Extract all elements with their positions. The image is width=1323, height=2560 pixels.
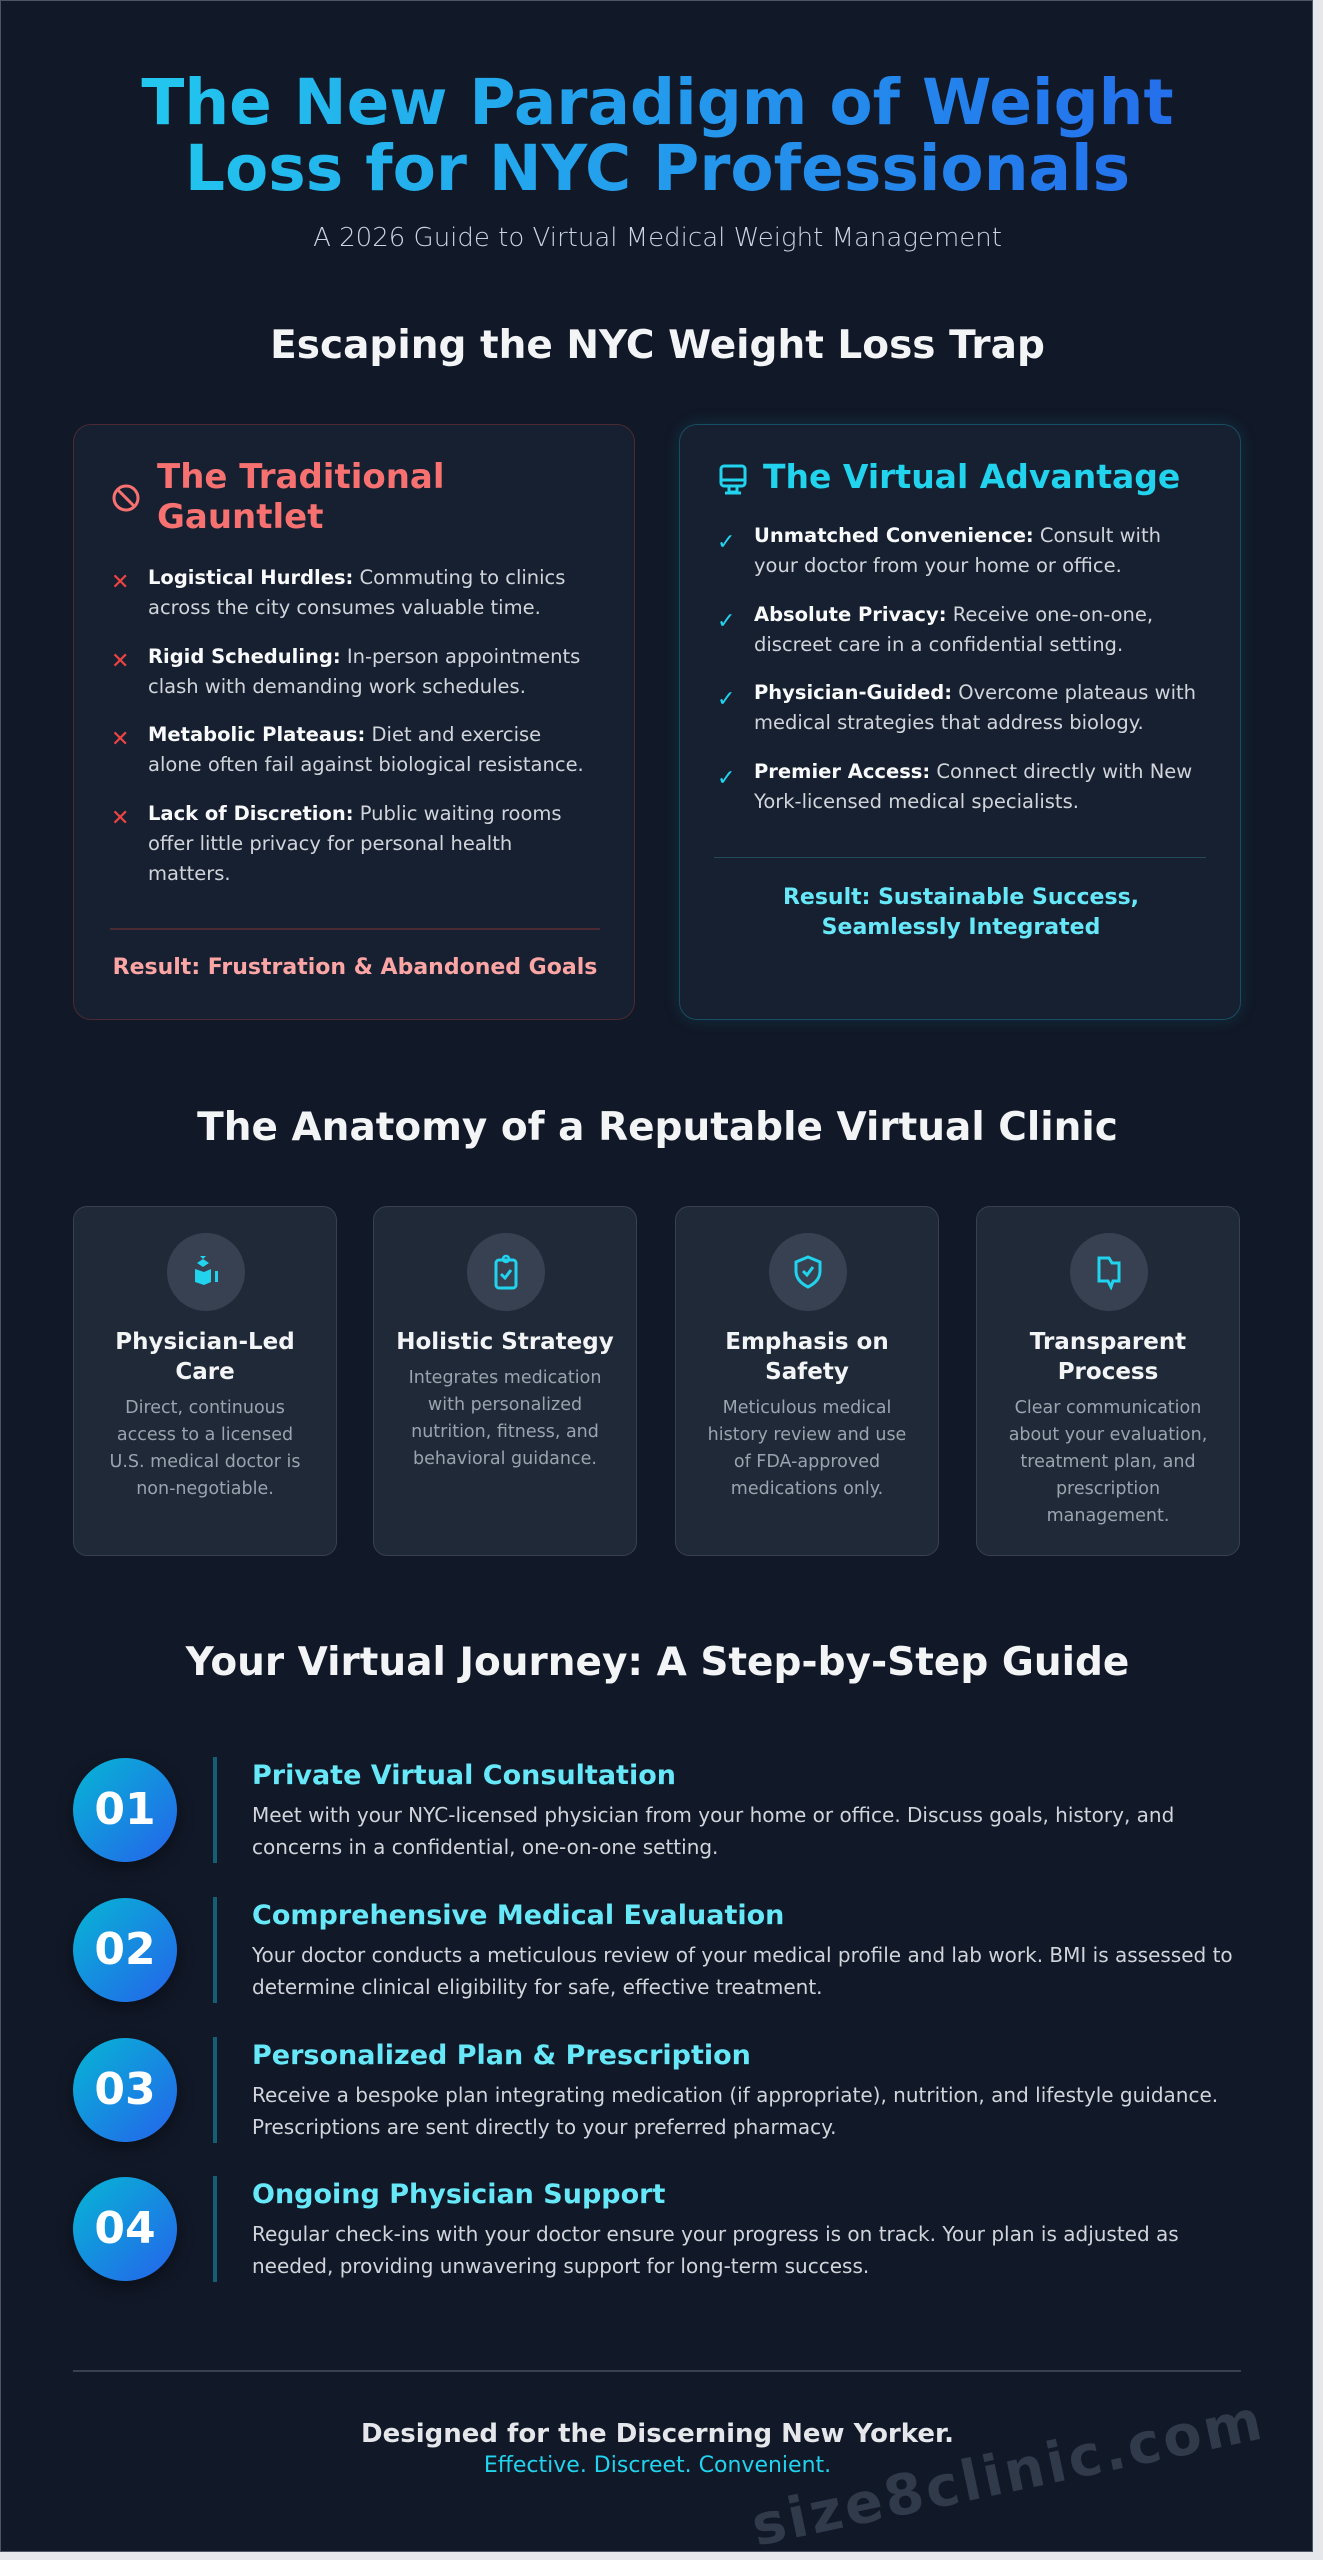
footer (361, 2419, 954, 2478)
list: hurdles: ✕ (111, 649, 129, 674)
card: safety: Safety (765, 1359, 849, 1385)
title (1, 70, 1314, 202)
card: transparent: Process (1058, 1359, 1158, 1385)
card: safety (675, 1206, 939, 1556)
step 04 (73, 2176, 1179, 2286)
card: physician-led: Direct, continuous access to a licensed U.S. medical doctor is non-negotiable. (110, 1398, 300, 1499)
panel: virtual advantage (679, 424, 1241, 1020)
icon: doctor (167, 1233, 245, 1311)
result: sustainable success: Result: Sustainable Success, (783, 885, 1139, 910)
panel: traditional gauntlet (73, 424, 635, 1020)
heading: journey: Your Virtual Journey: A Step-by-Step Guide (186, 1640, 1129, 1685)
list: benefits (717, 524, 1196, 813)
list: hurdles: ✕ (111, 570, 129, 595)
card: holistic (373, 1206, 637, 1556)
step 02: Comprehensive Medical Evaluation (252, 1900, 784, 1931)
title: Loss for NYC Professionals (185, 132, 1130, 205)
list: hurdles (111, 566, 584, 885)
step 02 (73, 1897, 1233, 2007)
title: The New Paradigm of Weight (141, 66, 1174, 139)
card: transparent (976, 1206, 1240, 1556)
step 01: Meet with your NYC-licensed physician from your home or office. Discuss goals, history, and concerns in a confidential, one-on-one setting. (252, 1803, 1174, 1859)
card: transparent: Clear communication about your evaluation, treatment plan, and prescription management. (1009, 1398, 1207, 1526)
result: sustainable success (783, 885, 1139, 940)
list: benefits: ✓ (717, 766, 735, 791)
list: hurdles: Lack of Discretion: Public waiting rooms offer little privacy for personal health matters. (148, 802, 562, 885)
heading: traditional gauntlet (157, 457, 445, 537)
card: safety: Meticulous medical history review and use of FDA-approved medications only. (708, 1398, 906, 1499)
icon: monitor (720, 464, 746, 494)
icon: prohibited (112, 484, 140, 512)
icon: shield (769, 1233, 847, 1311)
list: hurdles: ✕ (111, 727, 129, 752)
list: benefits: Premier Access: Connect directly with New York-licensed medical specialists. (754, 760, 1192, 813)
step 02: Your doctor conducts a meticulous review of your medical profile and lab work. BMI is assessed to determine clinical eligibility for safe, effective treatment. (252, 1943, 1233, 1999)
list: hurdles: Logistical Hurdles: Commuting to clinics across the city consumes valuable time. (148, 566, 565, 619)
list: benefits: ✓ (717, 530, 735, 555)
heading: anatomy: The Anatomy of a Reputable Virtual Clinic (197, 1105, 1118, 1150)
step 04: 04 (94, 2203, 156, 2254)
heading: traditional gauntlet: The Traditional (157, 457, 445, 497)
step 04: Regular check-ins with your doctor ensure your progress is on track. Your plan is adjusted as needed, providing unwavering support for long-term success. (252, 2222, 1179, 2278)
icon: speech (1070, 1233, 1148, 1311)
list: hurdles: Rigid Scheduling: In-person appointments clash with demanding work schedules. (148, 645, 580, 698)
list: benefits: Absolute Privacy: Receive one-on-one, discreet care in a confidential setting. (754, 603, 1153, 656)
heading: escaping trap: Escaping the NYC Weight Loss Trap (270, 323, 1045, 368)
list: hurdles: Metabolic Plateaus: Diet and exercise alone often fail against biological resistance. (148, 723, 584, 776)
card: holistic: Integrates medication with personalized nutrition, fitness, and behavioral guidance. (409, 1368, 601, 1469)
step 02: 02 (94, 1924, 156, 1975)
result: frustration: Result: Frustration & Abandoned Goals (113, 955, 597, 980)
step 01: Private Virtual Consultation (252, 1760, 676, 1791)
result: sustainable success: Seamlessly Integrated (822, 915, 1100, 940)
card: physician-led: Care (175, 1359, 235, 1385)
subtitle: A 2026 Guide to Virtual Medical Weight Management (313, 223, 1002, 253)
card: safety: Emphasis on (725, 1329, 889, 1355)
card: transparent: Transparent (1030, 1329, 1186, 1355)
step 03: Receive a bespoke plan integrating medication (if appropriate), nutrition, and lifestyle guidance. Prescriptions are sent directly to your preferred pharmacy. (252, 2083, 1218, 2139)
list: benefits: ✓ (717, 687, 735, 712)
heading: virtual advantage: The Virtual Advantage (763, 457, 1180, 496)
list: benefits: ✓ (717, 609, 735, 634)
step 03: Personalized Plan & Prescription (252, 2040, 751, 2071)
step 01 (73, 1757, 1174, 1867)
step 01: 01 (94, 1784, 156, 1835)
card: physician-led: Physician-Led (115, 1329, 295, 1355)
card: physician-led (73, 1206, 337, 1556)
list: hurdles: ✕ (111, 806, 129, 831)
footer: Effective. Discreet. Convenient. (484, 2453, 831, 2478)
heading: traditional gauntlet: Gauntlet (157, 497, 323, 537)
step 04: Ongoing Physician Support (252, 2179, 665, 2210)
footer: Designed for the Discerning New Yorker. (361, 2419, 954, 2449)
list: benefits: Physician-Guided: Overcome plateaus with medical strategies that address biology. (754, 681, 1196, 734)
icon: clipboard (467, 1233, 545, 1311)
step 03 (73, 2037, 1218, 2147)
step 03: 03 (94, 2064, 156, 2115)
list: benefits: Unmatched Convenience: Consult with your doctor from your home or office. (754, 524, 1161, 577)
card: holistic: Holistic Strategy (396, 1329, 614, 1355)
